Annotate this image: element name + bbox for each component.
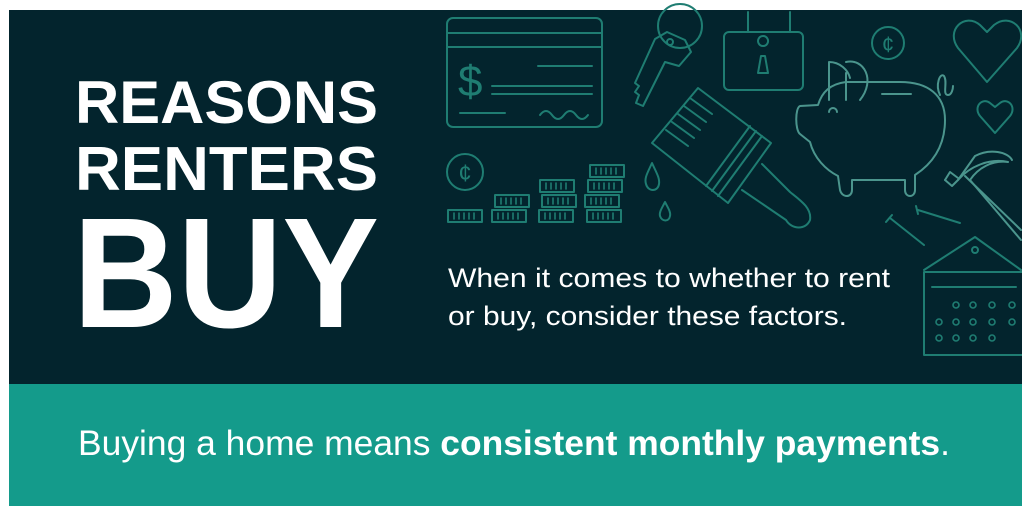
icon: piggy bank (796, 62, 953, 196)
right edge mask (1022, 0, 1030, 523)
title (73, 69, 379, 361)
panel: teal banner (9, 384, 1022, 506)
icon: nails (886, 206, 960, 245)
subtitle text (448, 263, 891, 331)
icon: paintbrush (652, 88, 810, 228)
icon: cent coin top: ¢ (882, 32, 894, 57)
subtitle text: or buy, consider these factors. (448, 301, 847, 331)
icon: hammer (945, 152, 1021, 240)
icons group (447, 4, 1024, 355)
panel: dark header (9, 10, 1022, 384)
title: RENTERS (75, 135, 378, 204)
icon: key (635, 4, 702, 106)
subtitle text: When it comes to whether to rent (448, 263, 891, 293)
icon: small heart (977, 101, 1013, 133)
icon: coin stacks (448, 165, 624, 222)
title: BUY (73, 186, 379, 361)
icon: cent coin top (872, 27, 904, 59)
icon: cent coin left: ¢ (458, 160, 472, 187)
title: REASONS (75, 69, 378, 136)
icon: paint drops (645, 163, 659, 190)
icon: check card: $ (458, 57, 482, 106)
icon: cent coin left (447, 154, 483, 190)
icon: big heart (954, 21, 1021, 82)
icon: calendar tag (924, 237, 1024, 355)
icon: padlock (724, 12, 803, 90)
icon: check card (447, 18, 602, 127)
banner text: Buying a home means consistent monthly payments. (78, 424, 950, 463)
